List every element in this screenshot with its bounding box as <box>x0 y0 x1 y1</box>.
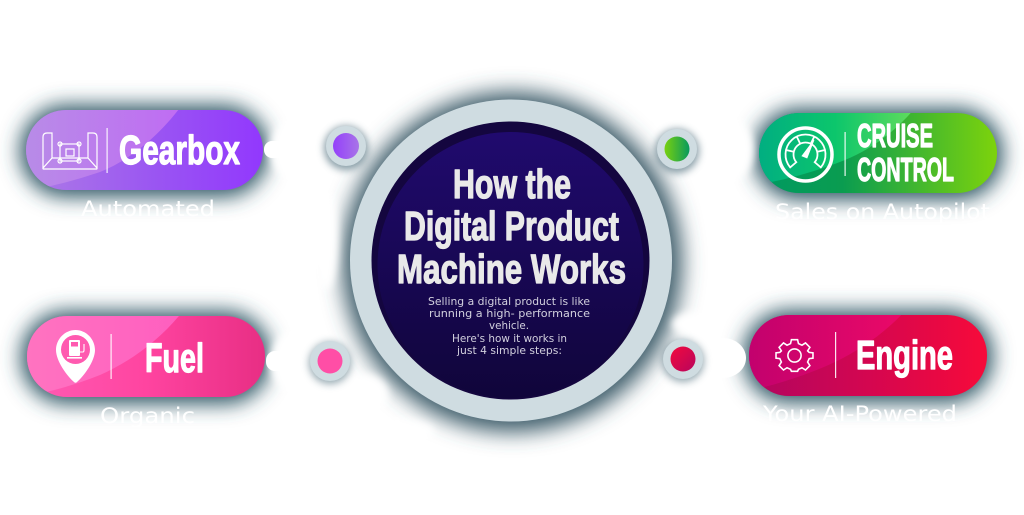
gloss <box>759 113 910 182</box>
label: Engine <box>856 332 953 378</box>
caption: automated: Automated <box>81 197 215 221</box>
caption: your ai-powered: Your AI-Powered <box>762 402 957 426</box>
outer ring <box>350 100 672 422</box>
caption: organic: Organic <box>100 404 195 428</box>
title <box>397 161 626 292</box>
divider <box>110 334 112 379</box>
label: Gearbox <box>119 127 240 173</box>
icon: gear <box>776 340 813 371</box>
connector dot: cruise control <box>655 129 699 173</box>
intro text: just 4 simple steps: <box>456 344 562 357</box>
panel: cruise control <box>755 108 997 193</box>
gloss <box>749 315 901 387</box>
divider <box>844 132 846 176</box>
title: Machine Works <box>397 246 626 292</box>
intro text: vehicle. <box>489 319 529 332</box>
soft shadows behind the pills <box>20 92 1003 432</box>
gloss <box>26 110 178 186</box>
connector dot: gearbox <box>324 126 368 170</box>
inner gradient disc <box>378 132 644 398</box>
caption: sales on autopilot: Sales on Autopilot <box>775 200 990 224</box>
white connector blobs <box>264 80 754 444</box>
central hub <box>350 100 672 422</box>
intro text: running a high- performance <box>429 307 590 320</box>
intro text: Selling a digital product is like <box>428 295 590 308</box>
icon: gauge <box>779 128 832 181</box>
divider <box>835 332 836 378</box>
title: Digital Product <box>404 203 619 249</box>
divider <box>106 128 108 173</box>
label: CRUISE <box>857 117 933 154</box>
label: Fuel <box>145 335 204 381</box>
pill <box>27 316 265 397</box>
icon: fuel pin <box>56 330 95 383</box>
connector dot: fuel <box>309 341 351 384</box>
connector dot: engine <box>662 339 704 382</box>
icon: gearbox <box>43 133 97 169</box>
gloss <box>27 316 179 392</box>
dark disc <box>372 122 650 400</box>
intro text <box>428 295 590 357</box>
label <box>857 117 954 188</box>
pill <box>26 110 263 190</box>
pill <box>749 315 987 396</box>
title: How the <box>453 161 571 207</box>
pill <box>759 113 997 193</box>
intro text: Here's how it works in <box>452 332 567 345</box>
panel: engine <box>744 310 987 396</box>
label: CONTROL <box>857 151 954 188</box>
panel: fuel <box>22 311 265 397</box>
panel: gearbox <box>26 110 263 190</box>
